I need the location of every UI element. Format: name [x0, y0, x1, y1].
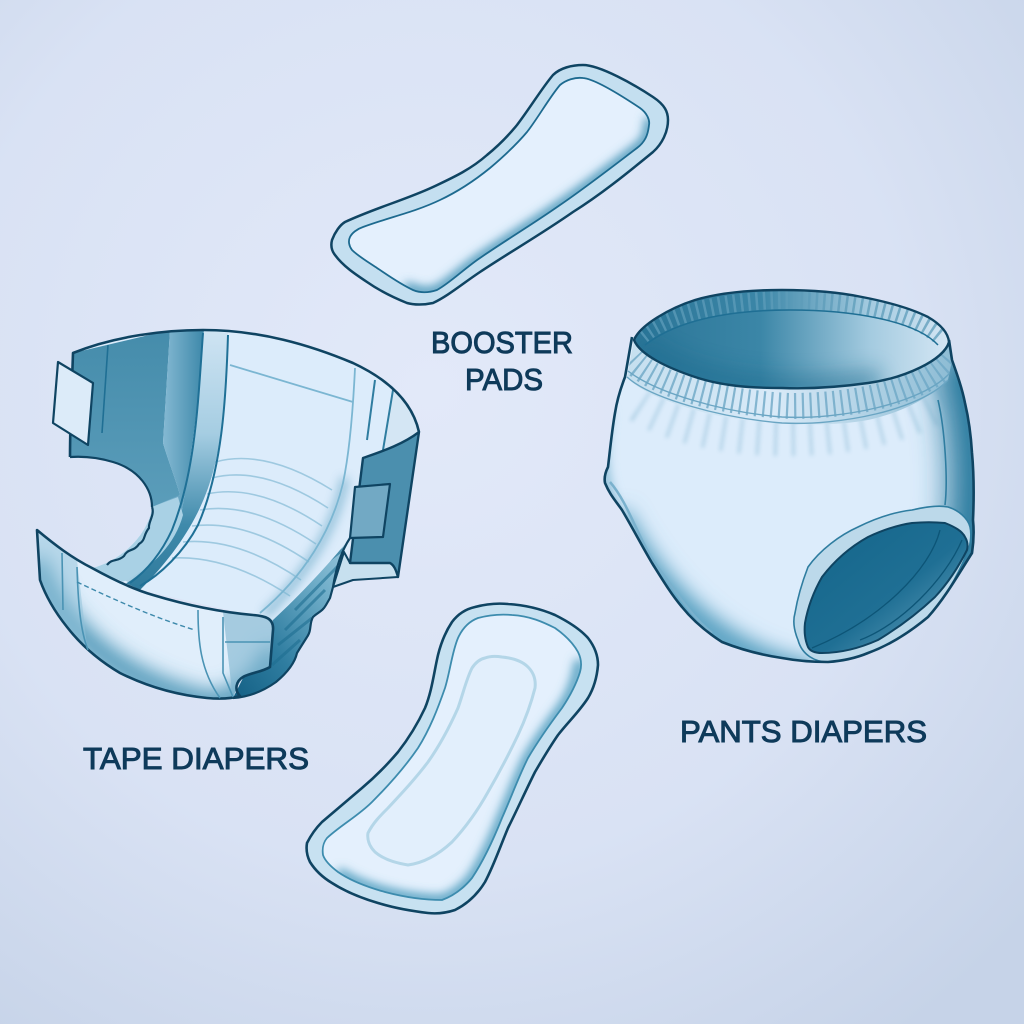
inner base — [70, 330, 419, 620]
flap outline — [37, 530, 273, 699]
pad outer edge — [331, 65, 668, 304]
pad inner surface — [349, 78, 649, 292]
rib lines — [632, 360, 950, 406]
pad shading — [405, 118, 649, 292]
left leg binding — [610, 482, 712, 633]
right stripes — [367, 380, 393, 450]
pad inner surface — [323, 615, 581, 900]
panel outline — [230, 365, 355, 613]
leg gathers — [107, 507, 153, 565]
leg opening — [805, 522, 968, 653]
label: tape diapers: TAPE DIAPERS — [83, 741, 309, 776]
label: booster pads: BOOSTER — [431, 325, 573, 360]
body — [605, 337, 974, 662]
left tape — [53, 362, 93, 445]
panel grooves — [172, 458, 332, 596]
panel shading — [265, 478, 345, 615]
back band ribs — [642, 300, 942, 338]
flap shading — [35, 560, 275, 703]
flap left panel — [38, 533, 86, 644]
left leg ruffle — [92, 497, 183, 582]
front flap — [37, 530, 273, 699]
stitch lines — [627, 371, 949, 423]
rim outline — [70, 330, 419, 457]
body shading left — [602, 410, 615, 510]
fold lines — [130, 333, 228, 586]
icon: contoured pad — [307, 604, 598, 913]
leg inner lines — [812, 530, 962, 648]
body shading right — [958, 350, 979, 600]
label: booster pads: PADS — [465, 362, 543, 397]
left leg curve — [70, 457, 152, 507]
body shading bottom — [615, 515, 815, 675]
fold strip — [125, 330, 228, 590]
back wall — [70, 330, 180, 510]
icon: pants diaper — [602, 290, 979, 675]
label: pants diapers: PANTS DIAPERS — [680, 714, 927, 749]
back band line — [645, 310, 938, 345]
rim outlines — [634, 290, 949, 388]
crease shadows — [640, 400, 945, 438]
flap details — [62, 553, 270, 698]
flap right panel — [223, 612, 273, 696]
label: booster pads — [431, 325, 573, 397]
opening lower shade — [656, 354, 892, 387]
back wall seam — [102, 345, 108, 433]
opening — [634, 290, 949, 388]
right ruffle — [234, 544, 346, 696]
side strip — [125, 331, 204, 582]
front waistband — [627, 340, 952, 424]
icon: tape diaper — [30, 330, 430, 705]
pad inner outline — [323, 615, 581, 900]
leg binding — [794, 506, 971, 662]
right inner wall — [383, 388, 430, 452]
pad shading — [338, 660, 580, 900]
side seam — [938, 400, 946, 505]
pad inner outline — [349, 78, 649, 292]
right tape — [350, 484, 390, 538]
pad outer edge — [307, 604, 598, 913]
lower right band foot — [333, 552, 398, 587]
right side band — [350, 432, 419, 577]
pad centre channel — [368, 656, 535, 865]
right ruffle outline — [233, 538, 350, 698]
icon: booster pad — [331, 65, 668, 304]
body outline — [605, 337, 974, 662]
